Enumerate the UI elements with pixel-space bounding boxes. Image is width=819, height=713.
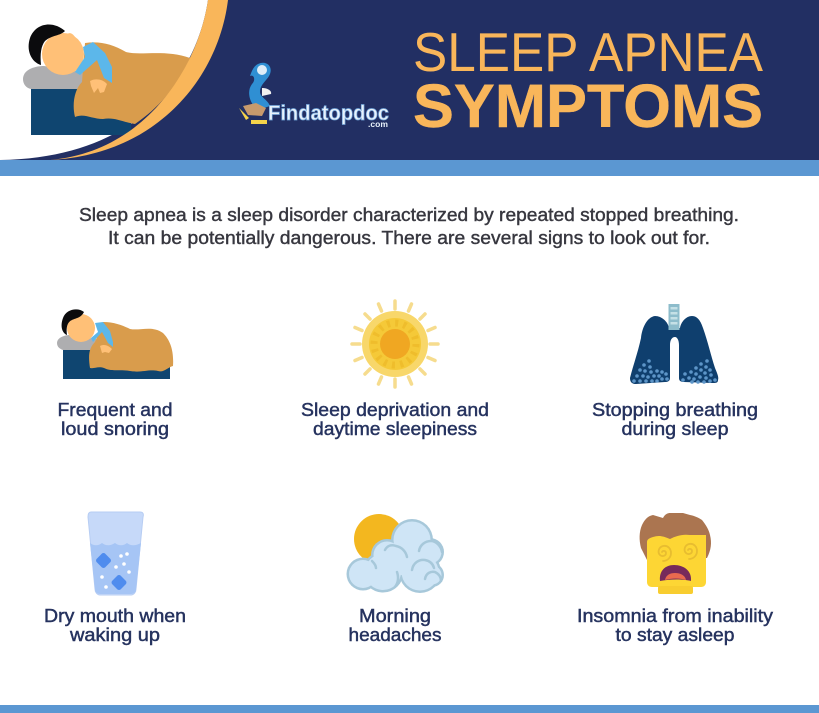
label: Frequent and bbox=[58, 400, 172, 420]
title bbox=[413, 21, 763, 140]
label: daytime sleepiness bbox=[313, 419, 477, 439]
symptom: dry mouth bbox=[44, 512, 186, 645]
logo: Findatopdoc bbox=[239, 63, 389, 129]
intro text: Sleep apnea is a sleep disorder characterized by repeated stopped breathing. bbox=[79, 205, 739, 225]
icon: glass of water bbox=[88, 512, 143, 595]
label: to stay asleep bbox=[616, 625, 734, 645]
header illustration: sleeping man bbox=[23, 25, 190, 135]
label: Stopping breathing bbox=[592, 400, 758, 420]
icon: lungs bbox=[630, 304, 718, 384]
icon: sun behind cloud bbox=[346, 514, 444, 593]
label bbox=[348, 606, 442, 645]
label: during sleep bbox=[622, 419, 728, 439]
icon: duck mascot bbox=[239, 63, 271, 124]
label: Dry mouth when bbox=[44, 606, 186, 626]
icon: sleeping man bbox=[57, 309, 173, 379]
header banner bbox=[0, 0, 819, 176]
logo wordmark: Findatopdoc bbox=[268, 102, 389, 125]
label bbox=[44, 606, 186, 645]
symptom: snoring bbox=[57, 309, 173, 439]
symptom: stopping breathing bbox=[592, 304, 758, 439]
label: headaches bbox=[348, 625, 442, 645]
label: loud snoring bbox=[61, 419, 169, 439]
symptom: sleep deprivation bbox=[301, 301, 489, 439]
footer band bbox=[0, 705, 819, 713]
label: Insomnia from inability bbox=[577, 606, 773, 626]
intro text bbox=[79, 205, 739, 248]
icon: dizzy face bbox=[640, 513, 711, 594]
symptom: morning headaches bbox=[346, 514, 444, 645]
title: SYMPTOMS bbox=[413, 72, 763, 140]
label: Morning bbox=[359, 606, 431, 626]
icon: sun bbox=[352, 301, 438, 387]
label: waking up bbox=[69, 625, 160, 645]
label bbox=[577, 606, 773, 645]
label bbox=[301, 400, 489, 439]
label bbox=[58, 400, 172, 439]
logo .com: .com bbox=[368, 120, 388, 129]
label: Sleep deprivation and bbox=[301, 400, 489, 420]
title: SLEEP APNEA bbox=[413, 21, 763, 83]
label bbox=[592, 400, 758, 439]
symptom: insomnia bbox=[577, 513, 773, 645]
intro text: It can be potentially dangerous. There are several signs to look out for. bbox=[108, 228, 710, 248]
